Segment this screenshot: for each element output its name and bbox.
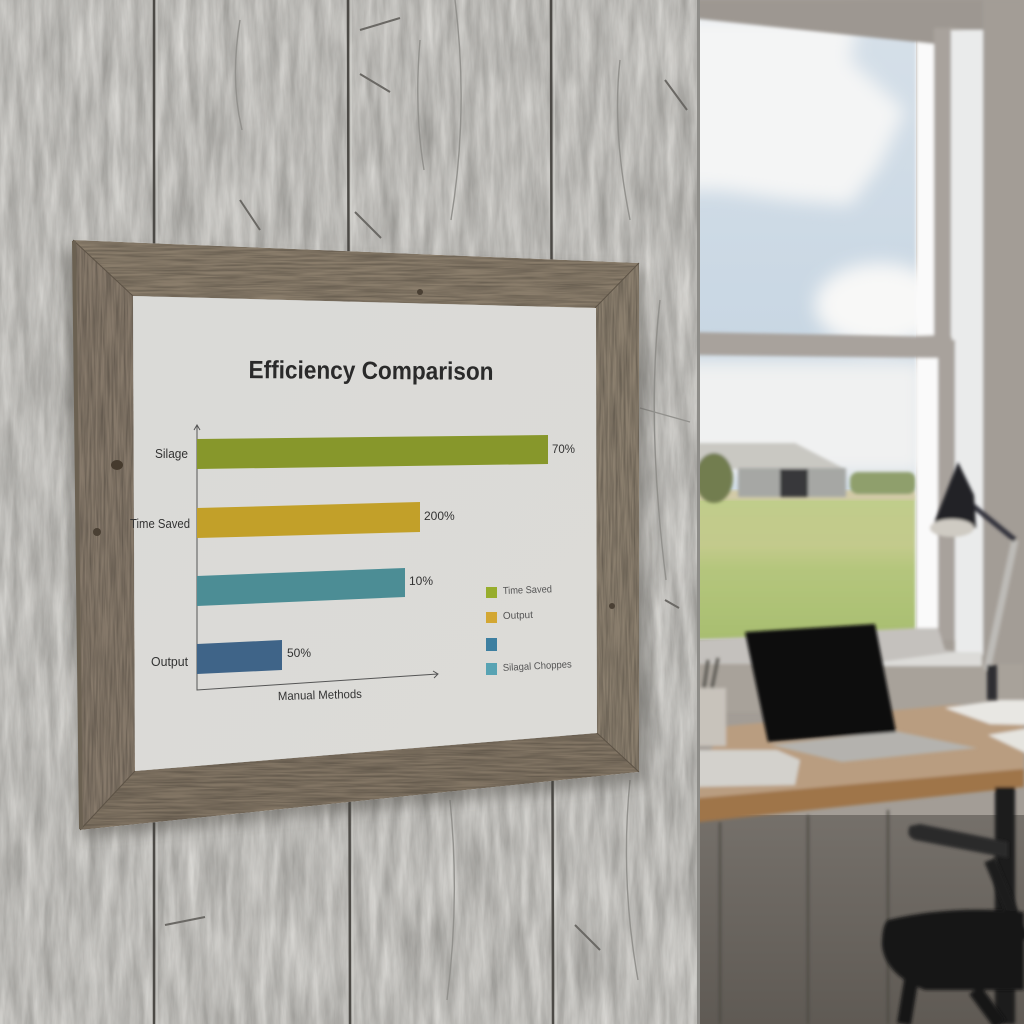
frame drop shadow	[64, 250, 647, 838]
legend	[486, 584, 572, 675]
desk scene	[690, 658, 1024, 1024]
bar: silage	[155, 435, 575, 469]
bar: time saved: 200%	[424, 509, 455, 523]
bar: time saved	[130, 502, 455, 538]
legend: Silagal Choppes	[503, 659, 572, 674]
office chair	[882, 824, 1024, 1024]
poster: efficiency comparison chart	[130, 296, 597, 771]
papers	[945, 700, 1024, 725]
bar: silage: 70%	[552, 442, 575, 456]
wooden wall	[0, 0, 700, 1024]
chart axes	[194, 425, 438, 690]
bar: output: 50%	[287, 646, 311, 660]
desk lamp	[930, 462, 1015, 700]
legend: Output	[503, 610, 533, 622]
bar: unlabeled teal	[197, 568, 433, 606]
pen cup	[700, 686, 728, 748]
window frame	[700, 1, 986, 668]
bar: silage: Silage	[155, 447, 188, 461]
bar: output: Output	[151, 655, 189, 669]
wooden picture frame	[73, 240, 639, 830]
window view	[680, 0, 1024, 830]
legend: Time Saved	[503, 584, 552, 597]
books	[690, 750, 800, 787]
laptop	[745, 624, 977, 762]
title: Efficiency Comparison	[248, 356, 494, 386]
bar: output	[151, 640, 311, 674]
bar: time saved: Time Saved	[130, 517, 190, 531]
x axis label: Manual Methods	[278, 687, 362, 703]
bar: unlabeled teal: 10%	[409, 574, 433, 588]
